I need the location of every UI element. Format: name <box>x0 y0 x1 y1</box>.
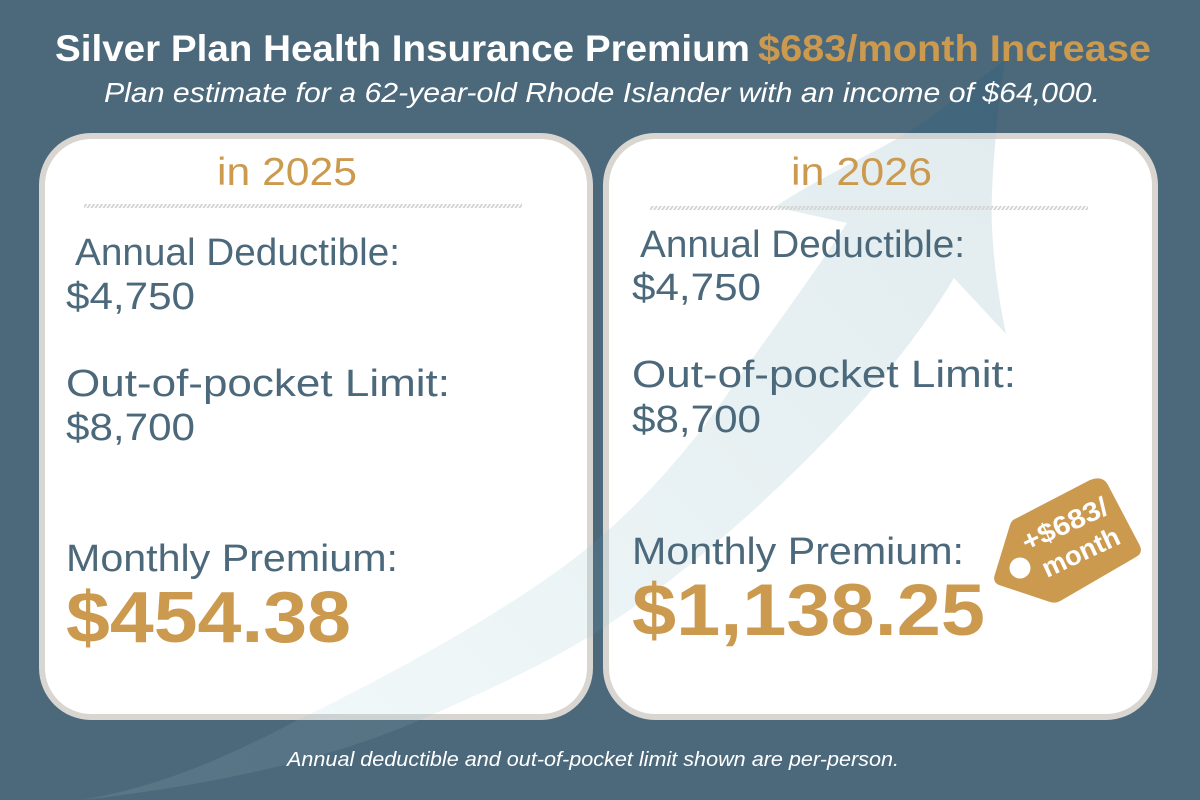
annual deductible label: Annual Deductible: <box>75 232 400 274</box>
out-of-pocket label: Out-of-pocket Limit: <box>66 363 450 405</box>
monthly premium value: $1,138.25 <box>632 570 985 651</box>
price tag callout <box>994 478 1141 603</box>
annual deductible value: $4,750 <box>632 267 761 309</box>
tag text: amount: +$683/ <box>1017 491 1113 557</box>
2025 panel content <box>66 151 522 658</box>
out-of-pocket value: $8,700 <box>632 399 761 441</box>
out-of-pocket label: Out-of-pocket Limit: <box>632 354 1016 396</box>
footnote: Annual deductible and out-of-pocket limit shown are per-person. <box>286 749 899 771</box>
tag text: per month: month <box>1037 521 1125 583</box>
divider <box>650 206 1088 210</box>
panel: 2025 <box>39 133 593 720</box>
subtitle: Plan estimate for a 62-year-old Rhode Islander with an income of $64,000. <box>104 77 1100 108</box>
arrow over panels <box>311 139 1006 714</box>
annual deductible value: $4,750 <box>66 276 195 318</box>
icon: tag shape <box>994 478 1141 603</box>
arrow over panel borders <box>298 133 996 720</box>
out-of-pocket value: $8,700 <box>66 407 195 449</box>
2026 panel content <box>632 151 1088 651</box>
monthly premium value: $454.38 <box>66 578 351 658</box>
icon: tag hole <box>1010 558 1030 578</box>
arrow behind panels <box>82 60 1006 800</box>
title: $683/month Increase <box>758 28 1151 69</box>
monthly premium label: Monthly Premium: <box>66 538 398 580</box>
heading: in 2025: in 2025 <box>217 151 357 194</box>
monthly premium label: Monthly Premium: <box>632 531 964 573</box>
panel: 2026 <box>603 133 1158 720</box>
annual deductible label: Annual Deductible: <box>640 224 965 266</box>
title: Silver Plan Health Insurance Premium <box>55 28 750 69</box>
heading: in 2026: in 2026 <box>791 151 932 194</box>
panel interiors <box>45 139 1152 714</box>
divider <box>84 204 522 208</box>
